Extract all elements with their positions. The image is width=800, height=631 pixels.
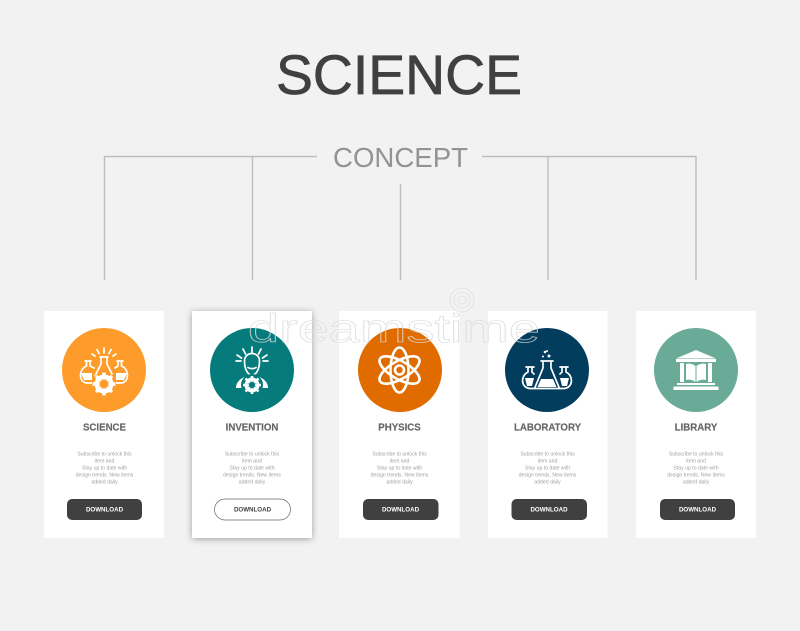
- description: invention: design trends. New items: [223, 472, 281, 478]
- description: science: Subscribe to unlock this: [77, 452, 132, 458]
- description: library: Subscribe to unlock this: [669, 452, 724, 458]
- button: download outlined: DOWNLOAD: [234, 506, 272, 514]
- description: physics: added daily: [386, 480, 413, 486]
- label: laboratory: LABORATORY: [514, 422, 582, 434]
- description: science: Stay up to date with: [82, 466, 127, 472]
- button: download: [660, 499, 735, 520]
- description: physics: [371, 452, 429, 486]
- description: invention: Subscribe to unlock this: [225, 452, 280, 458]
- card: laboratory: [488, 311, 608, 538]
- icon: atom: [358, 328, 442, 412]
- button: download: [67, 499, 142, 520]
- card: library: [636, 311, 756, 538]
- watermark: [248, 288, 540, 351]
- description: science: [76, 452, 134, 486]
- description: laboratory: added daily: [534, 480, 561, 486]
- description: laboratory: item and: [538, 458, 557, 464]
- label: invention: INVENTION: [226, 422, 278, 434]
- subtitle: concept: CONCEPT: [333, 142, 468, 173]
- connector lines: [104, 156, 696, 280]
- label: physics: PHYSICS: [378, 422, 421, 434]
- description: physics: item and: [390, 458, 409, 464]
- button: download: [363, 499, 438, 520]
- description: library: design trends. New items: [667, 472, 725, 478]
- description: invention: [223, 452, 281, 486]
- description: invention: added daily: [239, 480, 266, 486]
- description: science: added daily: [91, 480, 118, 486]
- description: science: design trends. New items: [76, 472, 134, 478]
- description: physics: design trends. New items: [371, 472, 429, 478]
- description: invention: Stay up to date with: [229, 466, 275, 472]
- description: laboratory: Subscribe to unlock this: [520, 452, 575, 458]
- description: laboratory: design trends. New items: [519, 472, 577, 478]
- button: download: DOWNLOAD: [86, 506, 124, 514]
- button: download: DOWNLOAD: [679, 506, 717, 514]
- title: SCIENCE: [276, 43, 522, 106]
- description: library: item and: [686, 458, 706, 464]
- button: download: DOWNLOAD: [530, 506, 568, 514]
- description: library: Stay up to date with: [673, 466, 719, 472]
- button: download: DOWNLOAD: [382, 506, 420, 514]
- label: library: LIBRARY: [675, 422, 718, 434]
- button: download: [512, 499, 587, 520]
- description: science: item and: [95, 458, 114, 464]
- description: laboratory: Stay up to date with: [525, 466, 570, 472]
- icon: laboratory flasks: [505, 328, 589, 412]
- icon: inventor with gear: [210, 328, 294, 412]
- label: science: SCIENCE: [83, 422, 127, 434]
- card: science: [44, 311, 164, 538]
- description: laboratory: [519, 452, 577, 486]
- description: physics: Stay up to date with: [377, 466, 422, 472]
- icon: science flasks and gear: [62, 328, 146, 412]
- description: library: [667, 452, 725, 486]
- button: download outlined: [214, 499, 290, 520]
- description: invention: item and: [242, 458, 262, 464]
- icon: library building: [654, 328, 738, 412]
- card: invention: [192, 311, 312, 538]
- card: physics: [339, 311, 460, 538]
- description: library: added daily: [683, 480, 710, 486]
- description: physics: Subscribe to unlock this: [372, 452, 427, 458]
- watermark: dreamstime: [248, 307, 540, 351]
